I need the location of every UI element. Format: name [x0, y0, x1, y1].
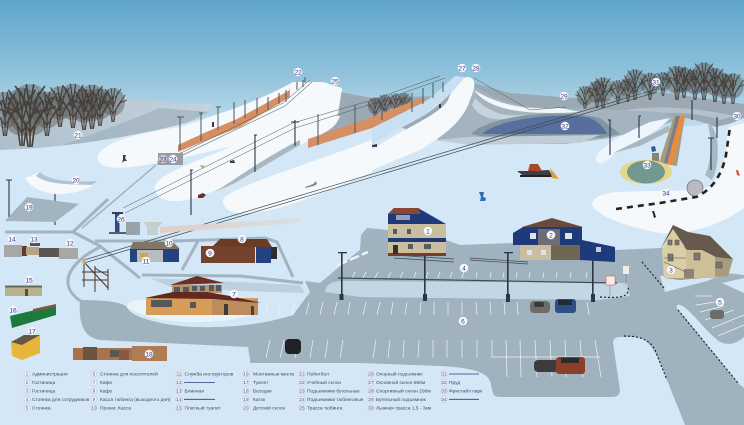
legend: Каток: [253, 397, 266, 403]
light strip between parkings: [325, 281, 630, 300]
legend: Служба инструкторов: [184, 372, 234, 378]
legend: 14: [177, 397, 182, 402]
right white slope: [592, 123, 744, 233]
number markers: 23: [159, 156, 167, 163]
number markers: 22: [294, 69, 302, 76]
barrier: [616, 127, 730, 209]
pond with grey rings: [434, 87, 680, 145]
road signs: [606, 266, 629, 296]
number markers: 6: [461, 318, 465, 325]
legend: Касса тюбинга (выходного дня): [100, 397, 171, 403]
zorb ball: [687, 180, 703, 196]
building 17: [11, 335, 40, 360]
building 16: [10, 304, 56, 328]
legend: 29: [369, 397, 374, 402]
legend: Платный туалет: [184, 405, 222, 412]
legend: 2: [26, 380, 29, 385]
tube track: [652, 116, 685, 166]
number markers: 27: [458, 65, 466, 72]
slope lamps: [177, 77, 443, 150]
legend: Гостиница: [32, 389, 55, 395]
legend: 1: [26, 372, 29, 377]
legend: Блинная: [184, 389, 204, 395]
number markers: 7: [232, 291, 236, 298]
legend: 28: [369, 389, 374, 394]
parking block 19: [5, 197, 79, 222]
legend: Кафе: [100, 380, 113, 386]
number markers: 16: [9, 307, 17, 314]
legend: Подъемники бугельные: [307, 389, 360, 395]
slope blue lane: [372, 76, 465, 144]
number markers: 17: [28, 328, 36, 335]
legend: 9: [93, 397, 96, 402]
number markers: 19: [25, 204, 33, 211]
legend: Опорный подъемник: [376, 371, 423, 378]
legend: Учебный склон: [307, 379, 341, 386]
bottom snow with legend background and lower island: [0, 337, 685, 425]
building 7: [145, 276, 261, 315]
number markers: 18: [145, 351, 153, 358]
number markers: 31: [652, 79, 660, 86]
legend: 13: [177, 389, 182, 394]
parking and road surface: [80, 228, 744, 425]
legend: 19: [244, 397, 249, 402]
right hill: [308, 82, 744, 144]
legend: 20: [244, 406, 249, 411]
legend: 31: [442, 372, 447, 377]
parking lines: [265, 272, 744, 377]
lift tower scaffolding: [82, 259, 108, 292]
building 15: [5, 286, 42, 296]
legend: Бугельный подъемник: [376, 396, 427, 403]
trees left: paintball forest: [0, 84, 127, 147]
legend: 7: [93, 380, 96, 385]
number markers: 12: [66, 240, 74, 247]
number markers: 13: [30, 236, 38, 243]
legend: 21: [300, 372, 305, 377]
number markers: 28: [472, 65, 480, 72]
number markers: 26: [117, 216, 125, 223]
legend: 34: [442, 397, 447, 402]
number markers: 1: [426, 228, 430, 235]
legend: Стоянка для посетителей: [100, 371, 158, 378]
legend: 5: [26, 406, 29, 411]
sky: [0, 0, 744, 130]
legend: Основной склон 580м: [376, 379, 425, 386]
number markers: 20: [72, 177, 80, 184]
legend: 15: [177, 406, 182, 411]
light band under cafe: [150, 278, 305, 293]
light barrier near lamp: [338, 252, 368, 265]
number markers: 25: [331, 78, 339, 85]
kids slope 20: [25, 172, 98, 194]
legend: Спортивный склон 290м: [376, 388, 431, 395]
number markers: 5: [718, 299, 722, 306]
distant hills: [0, 98, 215, 150]
orange strips: [178, 90, 424, 152]
legend: 16: [244, 372, 249, 377]
dark lamps: [6, 100, 717, 225]
groomer: [517, 164, 559, 179]
legend: 11: [177, 372, 182, 377]
number markers: 9: [208, 250, 212, 257]
number markers: 2: [549, 232, 553, 239]
legend: [24, 371, 483, 412]
building 1: [388, 208, 446, 256]
legend: Стоянка для сотрудников: [32, 397, 90, 403]
number markers: 15: [25, 277, 33, 284]
legend: Лыжная трасса 1,5 - 3км: [376, 406, 431, 412]
legend: 10: [92, 406, 97, 411]
legend: Туалет: [253, 380, 269, 386]
legend: 27: [369, 380, 374, 385]
number markers: 3: [669, 267, 673, 274]
legend: Детский склон: [253, 405, 285, 412]
legend: Кафе: [100, 389, 113, 395]
tower lift white slope: learning slope: [97, 82, 372, 213]
legend: 22: [300, 380, 305, 385]
lift cables: [82, 76, 657, 263]
legend: 12: [177, 380, 182, 385]
legend: 25: [300, 406, 305, 411]
skiers: [122, 104, 740, 218]
legend: Администрация: [32, 372, 68, 378]
legend: 18: [244, 389, 249, 394]
legend: 24: [300, 397, 305, 402]
legend: Фристайл парк: [449, 388, 483, 395]
legend: Прокат, Касса: [100, 406, 131, 412]
number markers: 14: [8, 236, 16, 243]
legend: Стоянка: [32, 406, 51, 412]
legend: 26: [369, 372, 374, 377]
lift 26 station: [109, 212, 163, 235]
number markers: 29: [560, 93, 568, 100]
island near cafe 7: [127, 277, 307, 327]
number markers: [8, 64, 741, 358]
number markers: 33: [643, 162, 651, 169]
building 18: [73, 346, 167, 361]
building 2: [513, 218, 615, 262]
legend: 32: [442, 380, 447, 385]
number markers: 4: [462, 265, 466, 272]
tan run: [160, 218, 300, 233]
lane white near tube: [596, 118, 670, 163]
building 8-9: [201, 239, 277, 263]
legend: Беседки: [253, 389, 272, 395]
road network: [5, 199, 303, 302]
cars: [285, 299, 724, 374]
legend: 33: [442, 389, 447, 394]
parking lamps: [338, 252, 598, 302]
legend: 4: [26, 397, 29, 402]
right snow strip: [677, 305, 744, 388]
legend: 8: [93, 389, 96, 394]
dashed kerbs: [600, 262, 738, 383]
legend: 6: [93, 372, 96, 377]
number markers: 8: [240, 236, 244, 243]
snow by hotel 3: [660, 275, 722, 292]
legend: 23: [300, 389, 305, 394]
number markers: 21: [74, 132, 82, 139]
number markers: 24: [169, 156, 177, 163]
building 14-12 block: [4, 243, 78, 259]
legend: 30: [369, 406, 374, 411]
legend: Трасса тюбинга: [307, 406, 343, 412]
legend: Подъемники тюбинговые: [307, 397, 364, 403]
number markers: 11: [143, 258, 150, 265]
number markers: 34: [662, 190, 670, 197]
building 10-11: [130, 242, 180, 262]
legend: 3: [26, 389, 29, 394]
legend: Гостиница: [32, 380, 55, 386]
legend: Пейнтбол: [307, 371, 329, 378]
number markers: 30: [733, 113, 741, 120]
legend: Пруд: [449, 380, 460, 386]
trees right: hill row: [367, 63, 744, 118]
white main slope: [372, 77, 474, 170]
number markers: 32: [561, 123, 569, 130]
building 3: [660, 225, 733, 280]
legend: Монтажные места: [253, 372, 294, 378]
number markers: 10: [165, 240, 173, 247]
fence: [338, 255, 617, 283]
freestyle park: [620, 160, 672, 184]
legend: 17: [244, 380, 249, 385]
